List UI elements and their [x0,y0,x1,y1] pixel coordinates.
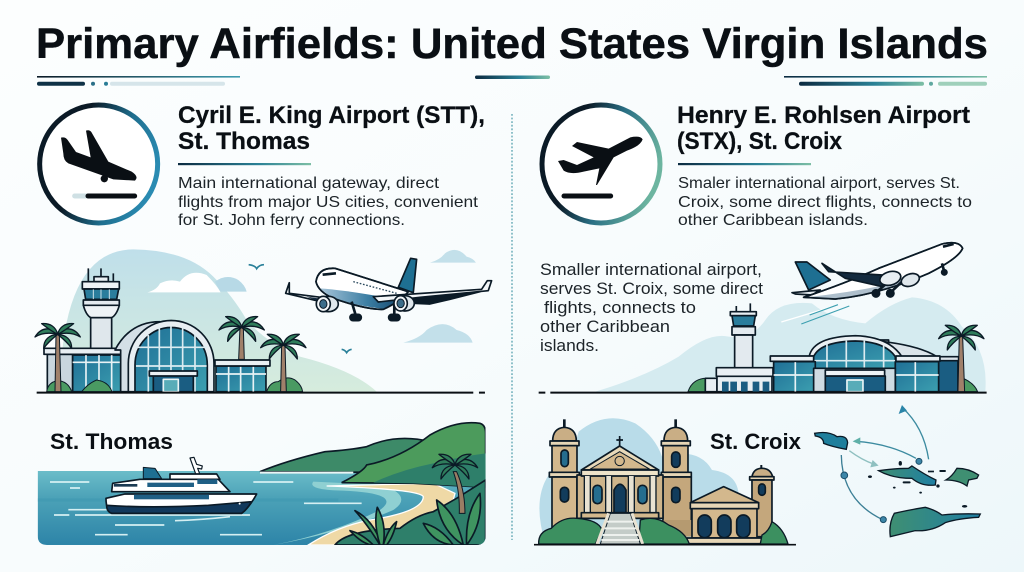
title: Primary Airfields: United States Virgin Islands [36,20,988,68]
text block: repeated St. Croix description: flights, connects to [544,299,696,317]
description: St. Croix airport: Croix, some direct flights, connects to [678,194,972,211]
illustration: St. Croix terminal and plane [539,243,987,393]
panel: St. Thomas airport summary [40,102,485,229]
bushes [688,377,978,392]
airplane [792,243,963,299]
airplane [286,258,492,321]
text block: repeated St. Croix description: other Caribbean [540,318,670,336]
shrubs [539,518,788,544]
label: St. Thomas: St. Thomas [50,429,173,454]
bushes [47,378,303,392]
text block: repeated St. Croix description: serves St. Croix, some direct [540,280,763,298]
heading: Cyril E. King Airport: St. Thomas [178,128,310,155]
description: St. Croix airport: other Caribbean islands. [678,212,868,229]
illustration: St. Thomas ferry bay [38,423,486,545]
map: Virgin Islands routes [815,405,980,537]
terminal arched hall [115,320,214,392]
beach and shallows [273,482,401,545]
description: St. Croix airport: Smaler international airport, serves St. [678,175,960,192]
left tower [549,419,579,529]
route nodes [841,458,922,523]
description: St. Thomas airport: for St. John ferry connections. [178,212,405,229]
far hill [260,438,430,473]
speed lines [781,305,838,322]
island: St. Thomas [815,433,848,449]
stairway [597,513,643,544]
side chapel [664,465,774,544]
small islets [868,461,967,508]
sea [38,471,486,545]
forest [342,423,486,487]
sky hill backdrop [60,249,377,392]
sky backdrop [595,297,986,392]
heading underline [178,163,311,165]
control tower [730,303,756,368]
heading: Henry E. Rohlsen Airport: Henry E. Rohlsen Airport [677,102,970,129]
terminal low block [705,368,773,392]
water highlights [50,482,362,535]
palm tree [939,325,984,392]
text block: repeated St. Croix description: islands. [540,337,599,355]
right tower [661,419,691,535]
label: St. Croix: St. Croix [710,429,802,454]
ground line [534,542,796,547]
heading underline [678,163,811,165]
ground line [37,390,485,396]
terminal main hall [770,336,959,392]
birds [249,265,352,353]
text block: repeated St. Croix description: Smaller international airport, [540,261,762,279]
center dotted divider [511,114,513,540]
description: St. Thomas airport: Main international gateway, direct [178,175,440,192]
heading: Henry E. Rohlsen Airport: (STX), St. Croix [677,128,843,155]
route arrows [841,405,929,519]
sky backdrop [539,418,739,543]
icon: landing plane [40,105,158,223]
terminal left wing [44,348,123,392]
control tower [82,268,119,348]
terminal right wing [215,360,270,392]
icon: departing plane [542,105,660,223]
island: St. Croix [890,507,980,537]
central facade [577,436,663,518]
description: St. Thomas airport: flights from major US cities, convenient [178,194,479,211]
island: Virgin Gorda [946,468,979,486]
foreground foliage [335,480,486,545]
ferry [106,457,257,513]
panel: St. Croix airport summary [542,102,972,229]
illustration: St. Thomas terminal and plane [35,249,492,393]
header accent rules [37,76,987,86]
clouds [147,250,476,343]
heading: Cyril E. King Airport: Cyril E. King Airport (STT), [178,102,485,129]
illustration: St. Croix historic church [534,418,796,545]
ground line [539,390,987,396]
palm trees [35,317,306,392]
island: St. John group [879,466,936,485]
